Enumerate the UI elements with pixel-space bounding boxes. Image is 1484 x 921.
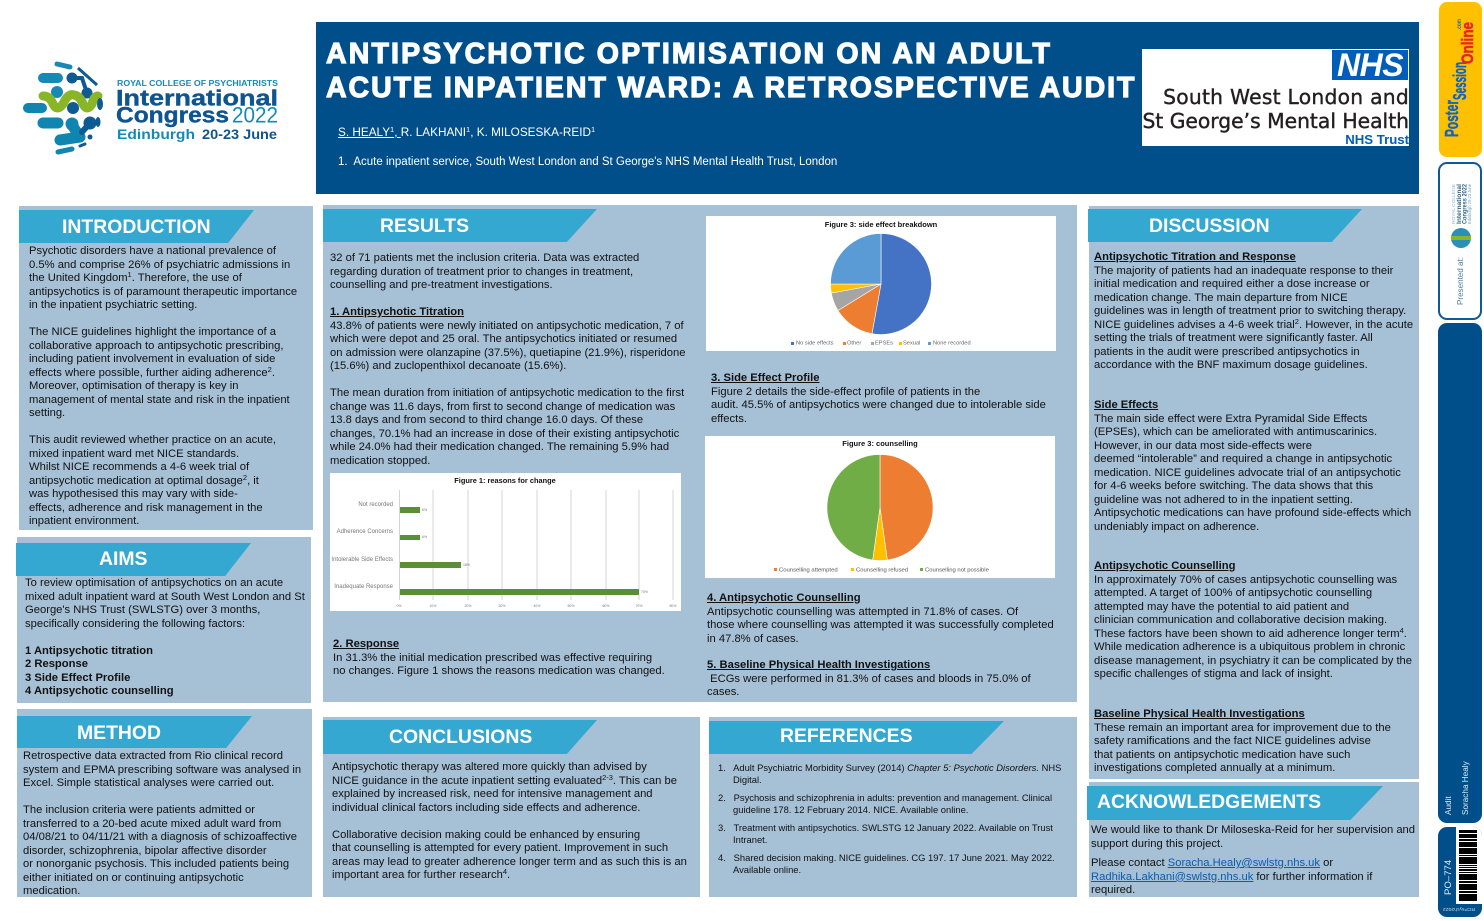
chart: reasons for change: 50% bbox=[567, 604, 575, 608]
response text: 2. Response bbox=[333, 638, 399, 650]
side effects discussion: Side Effects bbox=[1094, 399, 1158, 411]
counselling discussion: In approximately 70% of cases antipsychotic counselling was bbox=[1094, 574, 1397, 586]
introduction text: Whilst NICE recommends a 4-6 week trial of bbox=[29, 461, 249, 473]
acknowledgements text: support during this project. bbox=[1091, 838, 1223, 850]
introduction text: antipsychotics is of paramount therapeutic importance bbox=[29, 286, 297, 298]
heading: method: METHOD bbox=[77, 722, 161, 744]
chart: reasons for change: 10% bbox=[429, 604, 437, 608]
titration discussion: medication change. The main departure from NICE bbox=[1094, 292, 1348, 304]
method text: Excel. Simple statistical analyses were carried out. bbox=[23, 777, 274, 789]
method text bbox=[23, 750, 301, 897]
aims text: To review optimisation of antipsychotics on an acute bbox=[25, 577, 283, 589]
panel: aims bbox=[17, 537, 311, 703]
title banner bbox=[316, 22, 1419, 194]
chart: reasons for change: 70% bbox=[641, 590, 648, 594]
conclusions text: explained by increased risk, need for intensive management and bbox=[332, 788, 653, 800]
side effects discussion: The main side effect were Extra Pyramidal Side Effects bbox=[1094, 412, 1367, 424]
chart: side effect breakdown: None recorded bbox=[933, 341, 971, 347]
panel: discussion bbox=[1089, 206, 1419, 779]
physical health investigations text bbox=[707, 659, 1031, 698]
congress logo: 2022 bbox=[232, 102, 278, 128]
aims text: George's NHS Trust (SWLSTG) over 3 months, bbox=[25, 604, 260, 616]
NHS badge: NHS bbox=[1337, 47, 1403, 83]
chart: side effect breakdown: Other bbox=[847, 341, 861, 347]
antipsychotic titration text: 1. Antipsychotic Titration bbox=[330, 306, 464, 318]
antipsychotic counselling text: 4. Antipsychotic Counselling bbox=[707, 592, 861, 604]
side effects discussion bbox=[1094, 399, 1411, 532]
sidebar: presented at card bbox=[1438, 162, 1482, 320]
titration discussion: Antipsychotic Titration and Response bbox=[1094, 251, 1296, 263]
heading: discussion bbox=[1088, 209, 1362, 242]
heading: references bbox=[709, 721, 1004, 754]
method text: either initiated on or continuing antipsychotic bbox=[23, 872, 244, 884]
chart: reasons for change: 30% bbox=[498, 604, 506, 608]
congress logo bbox=[23, 62, 278, 154]
trust name: South West London and bbox=[1163, 85, 1409, 109]
titration discussion: The majority of patients had an inadequate response to their bbox=[1094, 264, 1393, 276]
panel: references bbox=[709, 717, 1077, 897]
reference list: 1. Adult Psychiatric Morbidity Survey (2014) Chapter 5: Psychotic Disorders. NHS bbox=[718, 762, 1061, 773]
heading: method bbox=[17, 716, 252, 748]
NHS trust label: NHS Trust bbox=[1345, 132, 1409, 147]
side effects discussion: undeniably impact on adherence. bbox=[1094, 520, 1259, 532]
heading: aims bbox=[16, 543, 251, 576]
congress logo: Edinburgh bbox=[117, 127, 195, 142]
introduction text: setting. bbox=[29, 407, 65, 419]
antipsychotic counselling text: Antipsychotic counselling was attempted in 71.8% of cases. Of bbox=[707, 606, 1018, 618]
sidebar: poster session online badge: .com bbox=[1457, 19, 1463, 30]
heading: introduction: INTRODUCTION bbox=[62, 216, 211, 238]
aims text: 1 Antipsychotic titration bbox=[25, 644, 153, 656]
method text: The inclusion criteria were patients admitted or bbox=[23, 804, 255, 816]
aims text bbox=[25, 577, 305, 697]
counselling discussion: These factors have been shown to aid adherence longer term4. bbox=[1094, 626, 1407, 640]
introduction text: mixed inpatient ward met NICE standards. bbox=[29, 448, 239, 460]
heading: references: REFERENCES bbox=[780, 725, 913, 747]
sidebar: category tab: Soracha Healy bbox=[1461, 760, 1470, 815]
titration discussion: setting the trials of treatment were significantly faster. All bbox=[1094, 332, 1373, 344]
response text bbox=[333, 638, 665, 677]
results intro text: 32 of 71 patients met the inclusion criteria. Data was extracted bbox=[330, 252, 639, 264]
introduction text: effects where possible, further aiding adherence2. bbox=[29, 364, 275, 378]
physical health investigations text: cases. bbox=[707, 686, 739, 698]
physical health investigations text: ECGs were performed in 81.3% of cases and bloods in 75.0% of bbox=[710, 672, 1031, 684]
reference list: Available online. bbox=[733, 864, 801, 875]
title: ANTIPSYCHOTIC OPTIMISATION ON AN ADULT bbox=[326, 38, 1052, 70]
reference list: Intranet. 4. Shared decision making. NICE guidelines. CG 197. 17 June 2021. May 2022. bbox=[718, 834, 1055, 863]
conclusions text: NICE guidance in the acute inpatient setting evaluated2-3. This can be bbox=[332, 772, 677, 786]
introduction text: 0.5% and comprise 26% of psychiatric admissions in bbox=[29, 258, 290, 270]
authors: S. HEALY1, R. LAKHANI1, K. MILOSESKA-REID1 bbox=[338, 125, 595, 139]
contact text: Radhika.Lakhani@swlstg.nhs.uk for further information if bbox=[1091, 870, 1372, 882]
title: ACUTE INPATIENT WARD: A RETROSPECTIVE AUDIT bbox=[326, 72, 1136, 104]
antipsychotic titration text: The mean duration from initiation of antipsychotic medication to the first bbox=[330, 387, 684, 399]
method text: or nonorganic psychosis. This included patients being bbox=[23, 858, 289, 870]
side effects discussion: guideline was not adhered to in the inpatient setting. bbox=[1094, 494, 1353, 506]
panel: conclusions bbox=[323, 717, 700, 897]
chart: reasons for change: 6% bbox=[422, 508, 427, 512]
counselling discussion: attempted. A target of 100% of antipsychotic counselling bbox=[1094, 587, 1372, 599]
chart: reasons for change: 20% bbox=[464, 604, 472, 608]
panel: acknowledgements bbox=[1089, 782, 1419, 897]
conclusions text: Collaborative decision making could be enhanced by ensuring bbox=[332, 828, 640, 840]
chart: reasons for change: Figure 1: reasons for change bbox=[454, 476, 556, 485]
antipsychotic counselling text: in 47.8% of cases. bbox=[707, 632, 799, 644]
aims text: 2 Response bbox=[25, 658, 88, 670]
sidebar: poster number and barcode bbox=[1438, 827, 1482, 917]
NHS logo bbox=[1142, 49, 1409, 146]
sidebar: poster session online badge bbox=[1439, 2, 1482, 157]
sidebar: presented at card: Presented at: bbox=[1456, 257, 1465, 305]
antipsychotic titration text bbox=[330, 306, 685, 466]
contact text bbox=[1091, 857, 1372, 896]
counselling discussion bbox=[1094, 560, 1412, 680]
results intro text: counselling and pre-treatment investigations. bbox=[330, 279, 553, 291]
response text: In 31.3% the initial medication prescribed was effective requiring bbox=[333, 652, 652, 664]
chart: reasons for change: 40% bbox=[533, 604, 541, 608]
heading: results: RESULTS bbox=[380, 215, 469, 237]
titration discussion: guidelines was in length of treatment prior to switching therapy. bbox=[1094, 305, 1406, 317]
reference list: guideline 178. 12 February 2014. NICE. Available online. 3. Treatment with antipsychotics. SWLSTG 12 January 2022. Available on Trust bbox=[718, 804, 1053, 833]
sidebar: presented at card: Congress 2022 bbox=[1462, 183, 1468, 224]
side effects discussion: (EPSEs), which can be ameliorated with antimuscarinics. bbox=[1094, 426, 1377, 438]
introduction text: This audit reviewed whether practice on an acute, bbox=[29, 434, 276, 446]
aims text: mixed adult inpatient ward at South West London and St bbox=[25, 590, 305, 602]
physical health discussion: that patients on antipsychotic medication have such bbox=[1094, 748, 1350, 760]
trust name: St George’s Mental Health bbox=[1142, 109, 1409, 133]
acknowledgements text bbox=[1091, 824, 1415, 850]
antipsychotic titration text: 13.8 days and from second to third change 16.0 days. Of these bbox=[330, 414, 643, 426]
chart: reasons for change: 80% bbox=[669, 604, 677, 608]
contact text: required. bbox=[1091, 884, 1135, 896]
side effects discussion: medication. NICE guidelines advocate trial of an antipsychotic bbox=[1094, 466, 1401, 478]
introduction text: Psychotic disorders have a national prevalence of bbox=[29, 245, 276, 257]
trust name bbox=[1142, 85, 1409, 133]
heading: discussion: DISCUSSION bbox=[1149, 215, 1270, 237]
contact text: Please contact Soracha.Healy@swlstg.nhs.uk or bbox=[1091, 857, 1333, 869]
sidebar: poster session online badge: Session bbox=[1450, 62, 1470, 100]
chart: reasons for change: 70% bbox=[635, 604, 643, 608]
side effects discussion: Antipsychotic medications can have profound side-effects which bbox=[1094, 507, 1411, 519]
aims text: specifically considering the following factors: bbox=[25, 618, 245, 630]
counselling discussion: While medication adherence is a ubiquitous problem in chronic bbox=[1094, 641, 1405, 653]
acknowledgements text: We would like to thank Dr Miloseska-Reid for her supervision and bbox=[1091, 824, 1415, 836]
physical health discussion: investigations completed annually at a minimum. bbox=[1094, 762, 1335, 774]
heading: conclusions: CONCLUSIONS bbox=[389, 726, 532, 748]
side effect profile text: audit. 45.5% of antipsychotics were changed due to intolerable side bbox=[711, 399, 1046, 411]
chart: counselling: Figure 3: counselling bbox=[842, 439, 918, 448]
side effect profile text bbox=[711, 372, 1046, 424]
introduction text bbox=[29, 245, 297, 527]
conclusions text bbox=[332, 761, 687, 881]
antipsychotic counselling text: those where counselling was attempted it was successfully completed bbox=[707, 619, 1054, 631]
chart: side effect breakdown: Figure 3: side effect breakdown bbox=[825, 220, 938, 229]
side effects discussion: However, in our data most side-effects were bbox=[1094, 440, 1312, 452]
counselling discussion: Antipsychotic Counselling bbox=[1094, 560, 1236, 572]
reference list bbox=[718, 762, 1061, 875]
sidebar: poster session online badge: Poster bbox=[1442, 100, 1462, 137]
sidebar: category tab bbox=[1438, 323, 1482, 823]
titration discussion: accordance with the BNF maximum dosage guidelines. bbox=[1094, 359, 1368, 371]
sidebar: category tab: Audit bbox=[1444, 796, 1453, 815]
side effect profile text: 3. Side Effect Profile bbox=[711, 372, 819, 384]
counselling discussion: disease management, in psychiatry it can be complicated by the bbox=[1094, 654, 1412, 666]
response text: no changes. Figure 1 shows the reasons medication was changed. bbox=[333, 665, 665, 677]
chart: reasons for change: 0% bbox=[396, 604, 402, 608]
side effects discussion: deemed “intolerable” and required a change in antipsychotic bbox=[1094, 453, 1392, 465]
chart: reasons for change bbox=[330, 473, 681, 611]
antipsychotic titration text: medication stopped. bbox=[330, 454, 430, 466]
affiliation: 1. Acute inpatient service, South West London and St George's NHS Mental Health Trust, London bbox=[338, 156, 837, 168]
chart: side effect breakdown: No side effects bbox=[796, 341, 834, 347]
introduction text: Moreover, optimisation of therapy is key in bbox=[29, 380, 239, 392]
chart: reasons for change: 60% bbox=[602, 604, 610, 608]
reference list: Digital. 2. Psychosis and schizophrenia in adults: prevention and management. Clinical bbox=[718, 774, 1052, 803]
congress logo: International bbox=[116, 86, 278, 110]
titration discussion: NICE guidelines advises a 4-6 week trial2. However, in the acute bbox=[1094, 316, 1413, 330]
physical health investigations text: 5. Baseline Physical Health Investigations bbox=[707, 659, 930, 671]
side effect profile text: effects. bbox=[711, 412, 747, 424]
introduction text: management of mental state and risk in the inpatient bbox=[29, 394, 290, 406]
results intro text bbox=[330, 252, 639, 291]
titration discussion: patients in the audit were prescribed antipsychotics in bbox=[1094, 346, 1360, 358]
side effect profile text: Figure 2 details the side-effect profile of patients in the bbox=[711, 386, 980, 398]
introduction text: in the inpatient psychiatric setting. bbox=[29, 299, 197, 311]
antipsychotic titration text: which were depot and 25 oral. The antipsychotics initiated or resumed bbox=[330, 333, 677, 345]
antipsychotic titration text: changes, 70.1% had an increase in dose of their existing antipsychotic bbox=[330, 428, 679, 440]
physical health discussion: Baseline Physical Health Investigations bbox=[1094, 708, 1305, 720]
sidebar: presented at card: Edinburgh 20-23 June bbox=[1467, 184, 1472, 224]
heading: acknowledgements: ACKNOWLEDGEMENTS bbox=[1097, 791, 1321, 813]
conclusions text: Antipsychotic therapy was altered more quickly than advised by bbox=[332, 761, 647, 773]
counselling discussion: attempted may have the potential to aid patient and bbox=[1094, 600, 1349, 612]
panel: method bbox=[17, 709, 312, 897]
chart: reasons for change: Intolerable Side Effects bbox=[331, 557, 393, 563]
physical health discussion bbox=[1094, 708, 1391, 774]
conclusions text: important area for further research4. bbox=[332, 867, 510, 881]
results intro text: regarding duration of treatment prior to changes in treatment, bbox=[330, 266, 633, 278]
sidebar: poster number and barcode: RCPsych2022 bbox=[1442, 907, 1475, 912]
titration discussion: initial medication and required either a dose increase or bbox=[1094, 278, 1370, 290]
chart: reasons for change: 18% bbox=[463, 563, 470, 567]
antipsychotic titration text: change was 11.6 days, from first to second change of medication was bbox=[330, 400, 675, 412]
chart: counselling: Counselling not possible bbox=[925, 568, 990, 574]
chart: side effect breakdown: Sexual bbox=[903, 341, 920, 347]
method text: 04/08/21 to 04/11/21 with a diagnosis of schizoaffective bbox=[23, 831, 297, 843]
panel: results bbox=[323, 205, 1077, 702]
chart: reasons for change: Not recorded bbox=[358, 502, 393, 508]
sidebar: presented at card: International bbox=[1457, 184, 1463, 224]
introduction text: including patient involvement in evaluation of side bbox=[29, 353, 275, 365]
chart: counselling: Counselling attempted bbox=[779, 568, 838, 574]
heading: introduction bbox=[19, 210, 254, 243]
method text: system and EPMA prescribing software was analysed in bbox=[23, 764, 301, 776]
method text: Retrospective data extracted from Rio clinical record bbox=[23, 750, 283, 762]
congress logo: ROYAL COLLEGE OF PSYCHIATRISTS bbox=[117, 78, 278, 88]
conclusions text: individual clinical factors including side effects and adherence. bbox=[332, 802, 640, 814]
method text: medication. bbox=[23, 885, 80, 897]
introduction text: antipsychotic medication at optimal dosage2, it bbox=[29, 472, 259, 486]
congress logo: 20-23 June bbox=[202, 127, 278, 142]
chart: reasons for change: Inadequate Response bbox=[334, 584, 394, 590]
antipsychotic counselling text bbox=[707, 592, 1054, 644]
heading: results bbox=[323, 209, 597, 242]
chart: counselling bbox=[705, 436, 1055, 578]
counselling discussion: specific challenges of stigma and lack of insight. bbox=[1094, 668, 1333, 680]
introduction text: inpatient environment. bbox=[29, 515, 139, 527]
introduction text: was hypothesised this may vary with side- bbox=[29, 488, 238, 500]
conclusions text: that counselling is attempted for every patient. Improvement in such bbox=[332, 842, 668, 854]
chart: reasons for change: 6% bbox=[422, 535, 427, 539]
chart: side effect breakdown: EPSEs bbox=[875, 341, 893, 347]
antipsychotic titration text: (15.6%) and zuclopenthixol decanoate (15.6%). bbox=[330, 360, 566, 372]
introduction text: collaborative approach to antipsychotic prescribing, bbox=[29, 340, 283, 352]
antipsychotic titration text: on admission were olanzapine (37.5%), quetiapine (21.9%), risperidone bbox=[330, 346, 685, 358]
side effects discussion: for 4-6 weeks before switching. The data shows that this bbox=[1094, 480, 1373, 492]
aims text: 3 Side Effect Profile bbox=[25, 672, 130, 684]
chart: reasons for change: Adherence Concerns bbox=[337, 529, 393, 535]
titration discussion bbox=[1094, 251, 1413, 371]
heading: conclusions bbox=[323, 720, 597, 754]
sidebar: poster number and barcode: PO–774 bbox=[1443, 859, 1454, 895]
sidebar: poster session online badge: Online bbox=[1458, 22, 1477, 64]
conclusions text: areas may lead to greater adherence longer term and as such this is an bbox=[332, 856, 687, 868]
introduction text: effects, adherence and risk management in the bbox=[29, 502, 263, 514]
title bbox=[326, 38, 1136, 104]
sidebar: presented at card: ROYAL COLLEGE bbox=[1451, 184, 1456, 224]
physical health discussion: These remain an important area for improvement due to the bbox=[1094, 722, 1391, 734]
congress logo: Congress bbox=[116, 102, 229, 128]
introduction text: The NICE guidelines highlight the importance of a bbox=[29, 326, 276, 338]
method text: transferred to a 20-bed acute mixed adult ward from bbox=[23, 818, 281, 830]
introduction text: the United Kingdom1. Therefore, the use of bbox=[29, 270, 242, 284]
chart: side effect breakdown bbox=[706, 216, 1056, 351]
heading: aims: AIMS bbox=[99, 548, 147, 570]
aims text: 4 Antipsychotic counselling bbox=[25, 685, 174, 697]
panel: introduction bbox=[19, 206, 313, 530]
heading: acknowledgements bbox=[1087, 786, 1383, 820]
chart: counselling: Counselling refused bbox=[856, 568, 908, 574]
counselling discussion: clinician communication and collaborative decision making. bbox=[1094, 614, 1387, 626]
antipsychotic titration text: 43.8% of patients were newly initiated on antipsychotic medication, 7 of bbox=[330, 320, 684, 332]
physical health discussion: safety ramifications and the fact NICE guidelines advise bbox=[1094, 735, 1371, 747]
antipsychotic titration text: while 24.0% had their medication changed. The remaining 5.9% had bbox=[330, 441, 669, 453]
method text: disorder, schizophrenia, bipolar affective disorder bbox=[23, 844, 267, 856]
